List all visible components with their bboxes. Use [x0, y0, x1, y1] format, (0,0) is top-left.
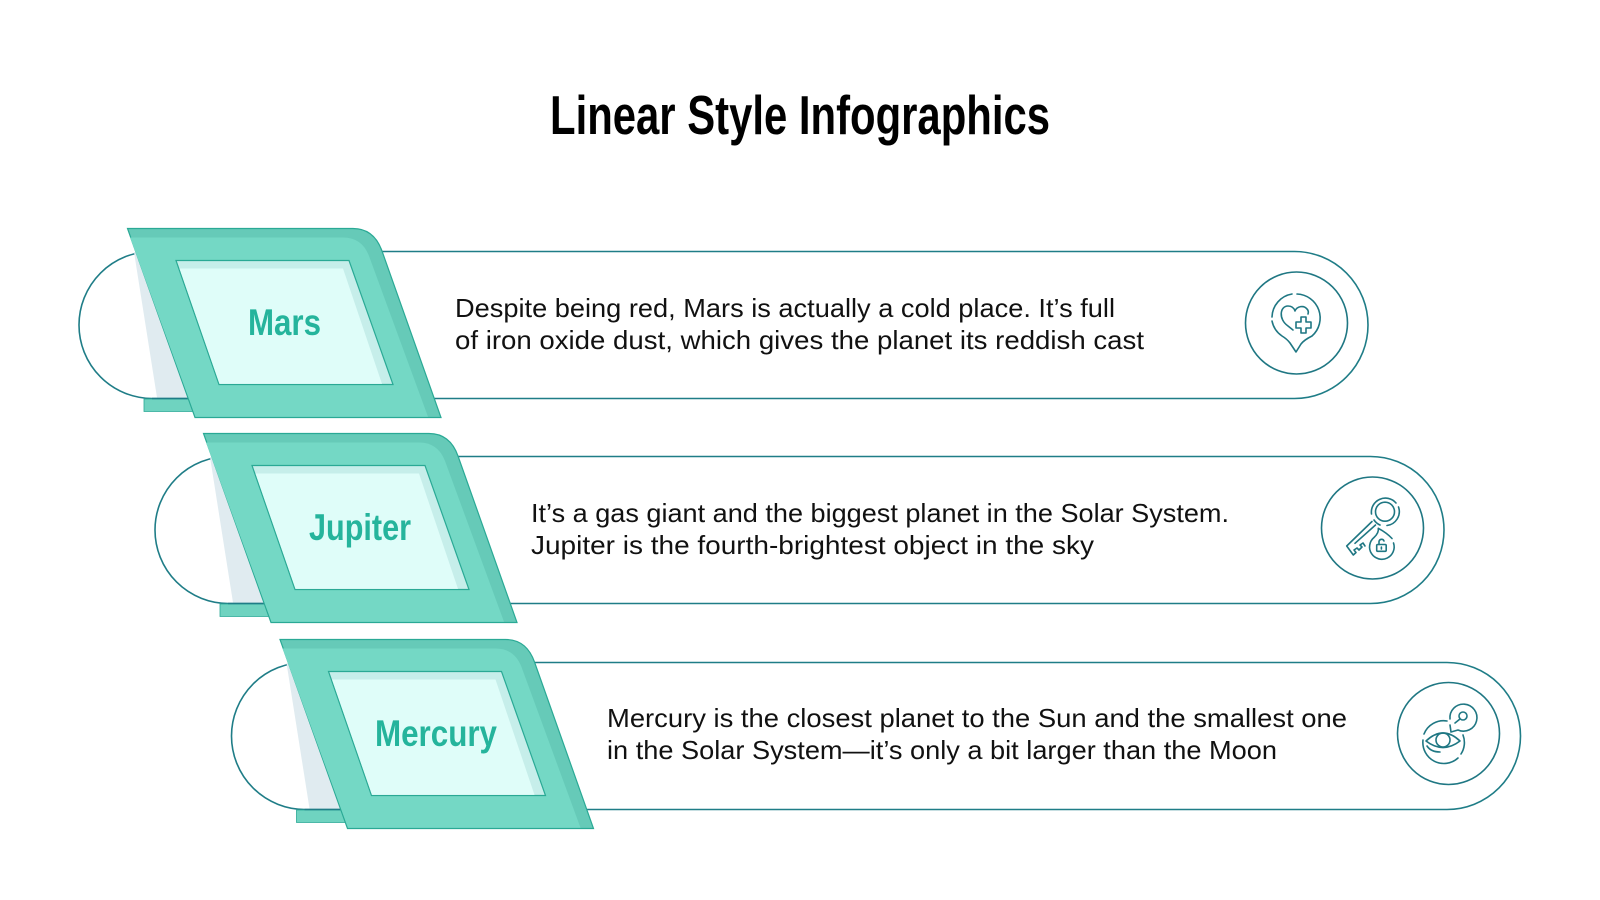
tag: Mars — [128, 228, 441, 418]
label: Mars: Mars — [248, 302, 321, 343]
row shapes: Mercury — [232, 640, 1520, 828]
panel: Mercury — [232, 640, 1520, 828]
label: Jupiter: Jupiter — [309, 507, 411, 548]
description: Jupiter: It’s a gas giant and the biggest planet in the Solar System. — [531, 498, 1229, 528]
description: Mars — [455, 293, 1145, 355]
description: Mars: Despite being red, Mars is actually a cold place. It’s full — [455, 293, 1115, 323]
panel: Jupiter — [155, 434, 1444, 622]
title: Linear Style Infographics — [550, 84, 1050, 146]
description: Mercury: in the Solar System—it’s only a bit larger than the Moon — [607, 735, 1277, 765]
tag shadow: Mars — [134, 252, 200, 412]
description: Mercury: Mercury is the closest planet to the Sun and the smallest one — [607, 703, 1347, 733]
description: Jupiter — [531, 498, 1229, 560]
icon: key and lock drop — [1322, 477, 1424, 579]
label: Mercury: Mercury — [375, 713, 497, 754]
description: Jupiter: Jupiter is the fourth-brightest object in the sky — [531, 530, 1094, 560]
description: Mars: of iron oxide dust, which gives the planet its reddish cast — [455, 325, 1145, 355]
description: Mercury — [607, 703, 1347, 765]
icon: heart location pin — [1246, 272, 1348, 374]
pill outline: Mars — [79, 252, 1368, 398]
row shapes: Jupiter — [155, 434, 1444, 622]
panel: Mars — [79, 228, 1368, 418]
icon: eye and magnifier bubble — [1398, 682, 1500, 784]
